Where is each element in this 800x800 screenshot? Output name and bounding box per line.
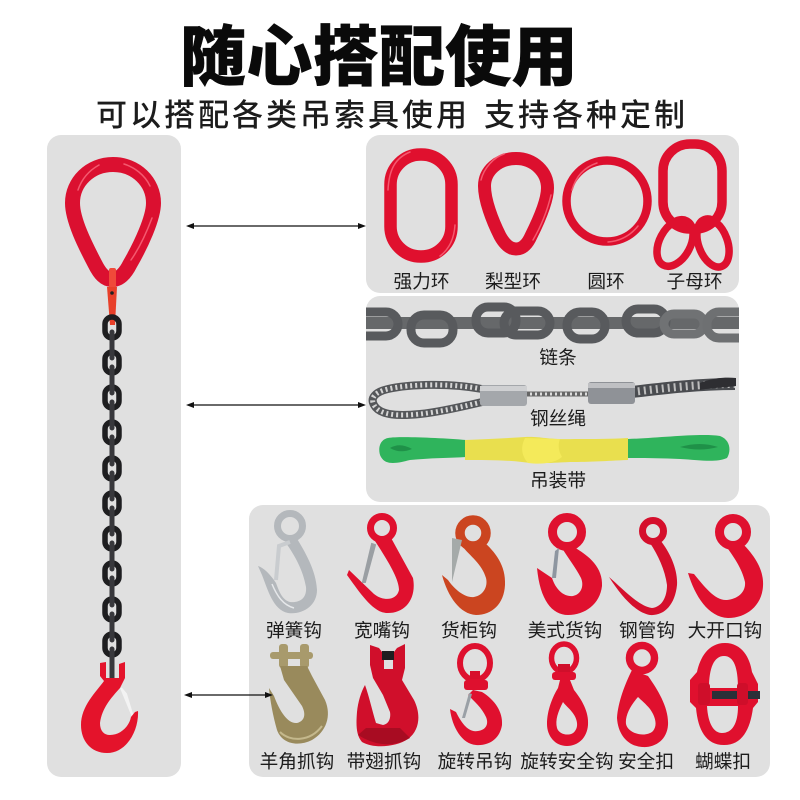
icon: black chain [105,317,119,678]
label: 弹簧钩 [266,620,322,641]
subtitle [96,98,688,133]
icon: pipe hook [609,520,677,615]
title: 随心搭配使用 [180,20,578,94]
icon: grab hook [269,644,328,744]
arrow: rings [186,223,366,229]
icon: master ring [388,152,455,256]
label: 带翅抓钩 [347,751,421,772]
icon: winged grab hook [357,644,418,746]
label: 强力环 [393,271,450,292]
label: 钢管钩 [619,620,675,641]
icon: lifting sling [379,435,729,464]
panel: hooks [249,505,770,777]
label: 子母环 [666,271,723,292]
subtitle: 支持各种定制 [484,98,688,133]
panel: rings [366,135,739,293]
label: 旋转安全钩 [520,751,614,772]
icon: butterfly link [690,643,760,745]
icon: wire rope [373,378,736,415]
icon: steel chain [350,307,751,343]
arrow: chain and rope [186,402,366,408]
label: 大开口钩 [688,620,762,641]
label: 宽嘴钩 [354,620,410,641]
label: 旋转吊钩 [438,751,512,772]
icon: spring hook [258,514,317,613]
label: 圆环 [587,271,625,292]
label: 蝴蝶扣 [695,751,751,772]
icon: wide mouth hook [347,516,414,613]
label: 羊角抓钩 [260,751,334,772]
icon: container hook [442,520,505,615]
subtitle: 可以搭配各类吊索具使用 [96,98,470,133]
icon: pear master link [72,164,154,280]
icon: large opening hook [688,518,763,618]
label: 美式货钩 [528,620,602,641]
label: 钢丝绳 [530,408,586,429]
panel: chain, rope, sling [350,296,751,502]
icon: swivel hook [450,646,502,745]
arrow: hooks [184,692,273,698]
icon: pear ring [481,154,551,249]
icon: safety hook [81,662,138,753]
label: 货柜钩 [441,620,497,641]
label: 安全扣 [618,751,674,772]
icon: swivel safety hook [547,644,588,746]
icon: master link assembly [650,144,735,272]
icon: american cargo hook [537,518,602,615]
icon: self-locking hook [617,646,668,747]
icon: connector [107,268,117,325]
icon: round ring [566,160,648,242]
label: 链条 [539,347,577,368]
label: 吊装带 [530,470,586,491]
label: 梨型环 [485,271,541,292]
panel: assembled chain sling [47,135,181,777]
